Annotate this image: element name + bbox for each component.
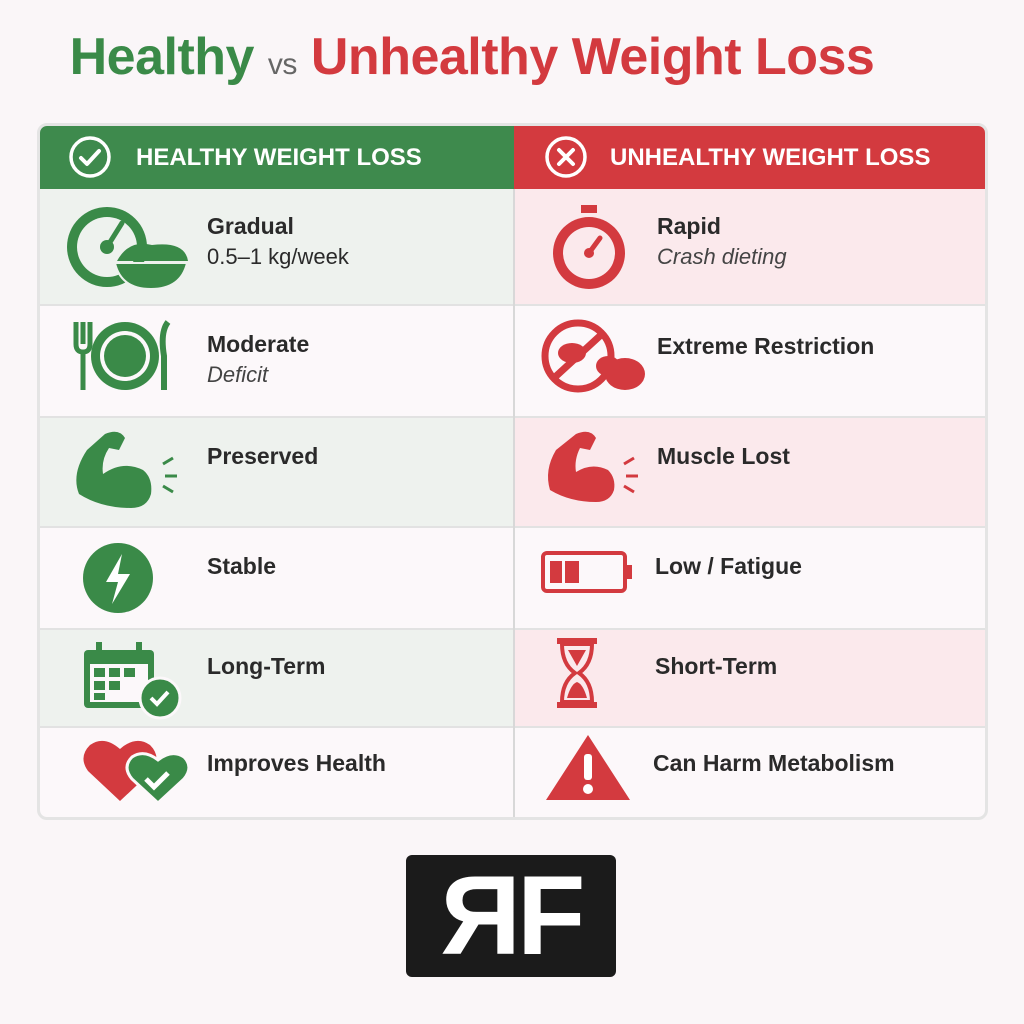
logo: RF xyxy=(406,855,616,977)
header: healthy: HEALTHY WEIGHT LOSS xyxy=(136,144,422,171)
unhealthy: rapid: Rapid xyxy=(657,213,721,239)
healthy: improves health: Improves Health xyxy=(207,750,386,776)
unhealthy: extreme restriction xyxy=(542,320,874,392)
unhealthy: rapid: Crash dieting xyxy=(657,244,787,269)
icon: plate and cutlery xyxy=(74,320,170,390)
icon: gauge and bowl xyxy=(67,207,188,288)
logo: RF: ЯF xyxy=(441,853,581,978)
healthy: long-term xyxy=(84,642,325,720)
unhealthy: can harm metabolism: Can Harm Metabolism xyxy=(653,750,895,776)
header: unhealthy xyxy=(514,126,991,189)
title: Healthy vs Unhealthy Weight Loss xyxy=(70,28,874,86)
healthy: preserved: Preserved xyxy=(207,443,318,469)
healthy: moderate deficit: Moderate xyxy=(207,331,309,357)
icon: lightning circle xyxy=(83,543,153,613)
icon: calendar check xyxy=(84,642,182,720)
healthy: gradual: 0.5–1 kg/week xyxy=(207,244,349,269)
unhealthy: short-term: Short-Term xyxy=(655,653,777,679)
icon: no food xyxy=(542,320,645,392)
unhealthy: can harm metabolism xyxy=(546,735,895,800)
unhealthy: extreme restriction: Extreme Restriction xyxy=(657,333,874,359)
healthy: improves health xyxy=(83,740,386,801)
unhealthy: low fatigue: Low / Fatigue xyxy=(655,553,802,579)
icon: hourglass xyxy=(557,638,597,708)
icon: weak arm xyxy=(548,432,638,502)
icon: hearts xyxy=(83,740,188,801)
healthy: moderate deficit: Deficit xyxy=(207,362,268,387)
icon: warning triangle xyxy=(546,735,630,800)
healthy: stable energy: Stable xyxy=(207,553,276,579)
header: unhealthy: UNHEALTHY WEIGHT LOSS xyxy=(610,144,930,171)
unhealthy: muscle lost: Muscle Lost xyxy=(657,443,790,469)
header: healthy xyxy=(40,126,514,189)
icon: stopwatch xyxy=(553,205,625,289)
healthy: gradual xyxy=(67,207,349,288)
icon: x circle xyxy=(545,136,587,178)
healthy: preserved xyxy=(76,432,318,508)
healthy: moderate deficit xyxy=(74,320,309,390)
unhealthy: rapid xyxy=(553,205,787,289)
icon: check circle xyxy=(69,136,111,178)
healthy: long-term: Long-Term xyxy=(207,653,325,679)
icon: low battery xyxy=(541,551,632,593)
healthy: stable energy xyxy=(83,543,276,613)
unhealthy: low fatigue xyxy=(541,551,802,593)
healthy: gradual: Gradual xyxy=(207,213,294,239)
unhealthy: muscle lost xyxy=(548,432,790,502)
comparison table xyxy=(37,123,988,820)
row backgrounds xyxy=(40,189,514,306)
unhealthy: short-term xyxy=(557,638,777,708)
icon: flexed arm xyxy=(76,432,177,508)
